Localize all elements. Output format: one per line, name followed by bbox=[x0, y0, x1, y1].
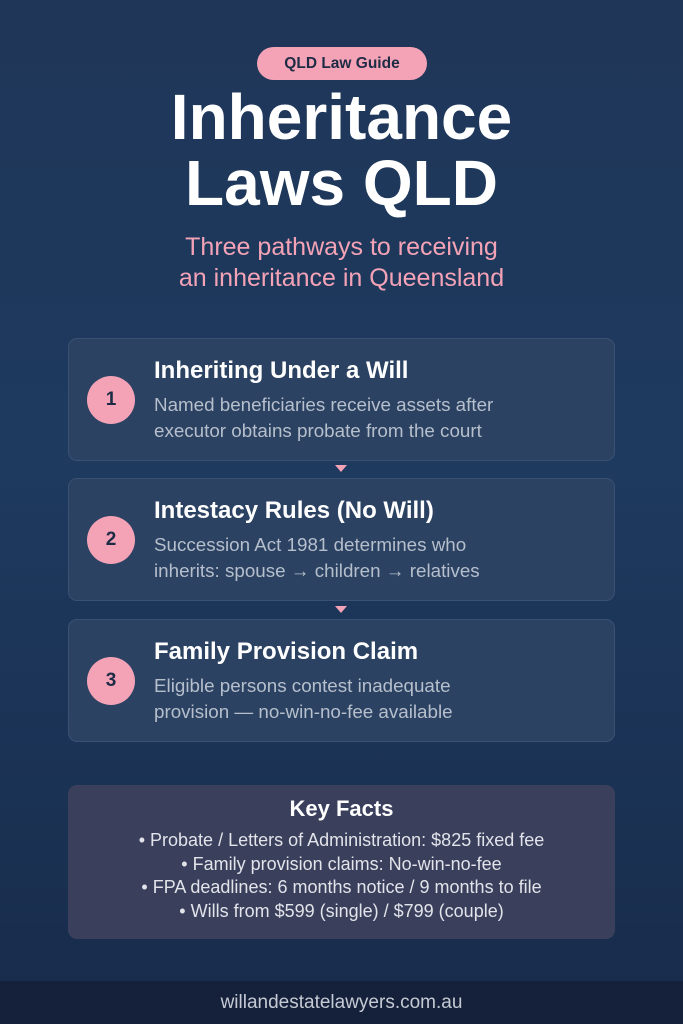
badge: QLD Law Guide bbox=[284, 55, 400, 72]
subtitle: an inheritance in Queensland bbox=[179, 264, 504, 292]
key facts list: • Probate / Letters of Administration: $825 fixed fee bbox=[139, 830, 544, 850]
card 3 text: provision — no-win-no-fee available bbox=[154, 701, 453, 722]
title bbox=[171, 81, 512, 219]
title: Laws QLD bbox=[185, 147, 498, 219]
card 2 text bbox=[154, 534, 480, 581]
card 3 text: Eligible persons contest inadequate bbox=[154, 675, 451, 696]
icon: number 3 bbox=[87, 657, 135, 705]
arrow 2 bbox=[335, 606, 347, 613]
icon: number 1: 1 bbox=[106, 389, 116, 410]
card 2 text: inherits: spouse → children → relatives bbox=[154, 560, 480, 581]
card 2 heading: Intestacy Rules (No Will) bbox=[154, 497, 434, 524]
arrow 1 bbox=[335, 465, 347, 472]
card 1 text: executor obtains probate from the court bbox=[154, 420, 482, 441]
panel: key facts bbox=[68, 785, 615, 939]
key facts list bbox=[139, 830, 544, 921]
card 1 heading: Inheriting Under a Will bbox=[154, 357, 408, 384]
card 1 text bbox=[154, 394, 493, 441]
icon: number 2: 2 bbox=[106, 529, 116, 550]
title: Inheritance bbox=[171, 81, 512, 153]
icon: number 1 bbox=[87, 376, 135, 424]
card 2 bbox=[68, 478, 615, 601]
icon: number 2 bbox=[87, 516, 135, 564]
card 2 text: Succession Act 1981 determines who bbox=[154, 534, 466, 555]
footer bbox=[0, 981, 683, 1024]
icon: number 3: 3 bbox=[106, 670, 116, 691]
subtitle: Three pathways to receiving bbox=[185, 233, 498, 261]
card 3 heading: Family Provision Claim bbox=[154, 638, 418, 665]
key facts list: • FPA deadlines: 6 months notice / 9 months to file bbox=[141, 877, 542, 897]
badge bbox=[257, 47, 427, 80]
subtitle bbox=[179, 233, 504, 292]
card 1 bbox=[68, 338, 615, 461]
key facts list: • Wills from $599 (single) / $799 (couple) bbox=[179, 901, 504, 921]
key facts heading: Key Facts bbox=[290, 796, 393, 821]
key facts list: • Family provision claims: No-win-no-fee bbox=[181, 854, 502, 874]
card 1 text: Named beneficiaries receive assets after bbox=[154, 394, 493, 415]
footer: willandestatelawyers.com.au bbox=[221, 992, 462, 1013]
card 3 bbox=[68, 619, 615, 742]
card 3 text bbox=[154, 675, 453, 722]
